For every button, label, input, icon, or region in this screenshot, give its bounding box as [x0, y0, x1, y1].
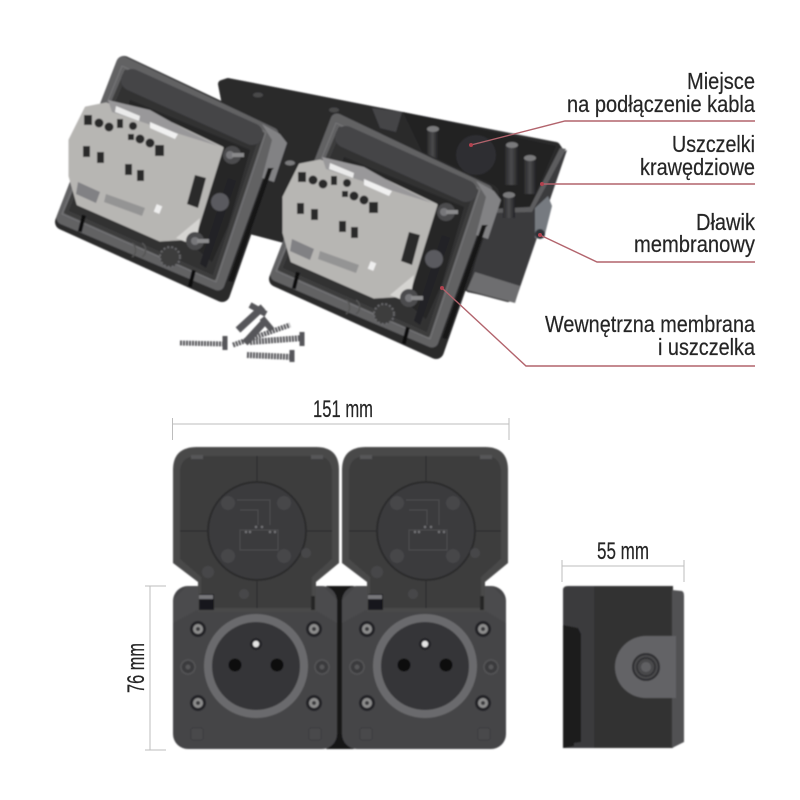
label: Uszczelki krawędziowe: krawędziowe — [640, 154, 755, 180]
dimension: height 76 mm: 76 mm — [123, 643, 150, 693]
label: Miejsce na podłączenie kabla: na podłączenie kabla — [567, 91, 755, 117]
label: Wewnętrzna membrana i uszczelka: i uszczelka — [658, 334, 755, 360]
right socket with open lid — [342, 447, 508, 749]
label: Miejsce na podłączenie kabla — [567, 68, 755, 117]
side view of the box — [563, 586, 684, 748]
front view: double socket — [173, 447, 508, 749]
callout: edge seals — [542, 183, 755, 185]
membrane gland — [615, 636, 676, 698]
mounting screws — [180, 305, 303, 362]
right opened module with socket insert — [276, 120, 501, 351]
label: Dławik membranowy: membranowy — [634, 231, 755, 257]
callout end dots — [440, 143, 544, 290]
label: Uszczelki krawędziowe: Uszczelki — [672, 131, 755, 157]
connector between sockets — [326, 586, 354, 749]
label: Wewnętrzna membrana i uszczelka: Wewnętrzna membrana — [545, 311, 755, 337]
dimension: height 76 mm — [123, 586, 166, 750]
label: Uszczelki krawędziowe — [640, 131, 755, 180]
callout: cable connection — [471, 121, 755, 145]
callout: membrane gland — [540, 235, 755, 262]
callout: inner membrane — [442, 288, 755, 366]
product photo: opened double socket box with screws — [62, 63, 567, 362]
dimension: depth 55 mm — [562, 538, 684, 582]
label: Dławik membranowy: Dławik — [696, 209, 755, 235]
dimension: width 151 mm — [172, 396, 509, 440]
back box — [222, 82, 567, 303]
label: Wewnętrzna membrana i uszczelka — [545, 311, 755, 360]
callout lines — [442, 121, 755, 366]
label: Miejsce na podłączenie kabla: Miejsce — [687, 68, 755, 94]
dimension: width 151 mm: 151 mm — [313, 396, 373, 423]
dimension: depth 55 mm: 55 mm — [597, 538, 649, 565]
left socket with open lid — [173, 447, 339, 749]
left opened module with socket insert — [62, 63, 287, 294]
labels — [545, 68, 755, 360]
label: Dławik membranowy — [634, 209, 755, 257]
